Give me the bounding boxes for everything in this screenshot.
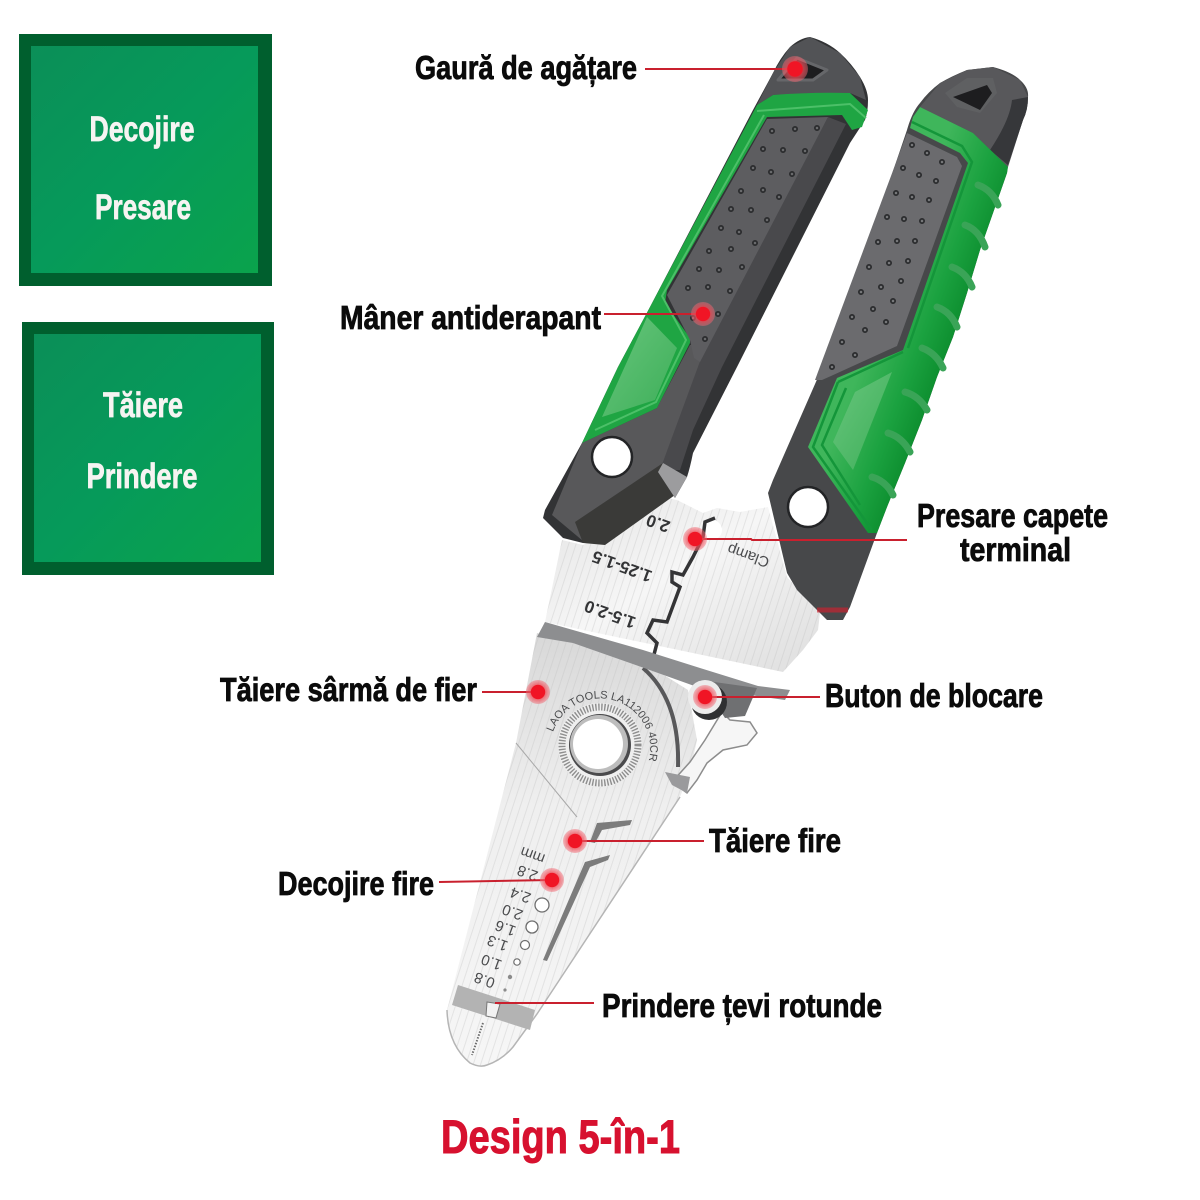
callout: decojire fire bbox=[278, 865, 564, 902]
stripping gauge: 1.6 bbox=[493, 916, 518, 939]
callout: buton de blocare: Buton de blocare bbox=[825, 677, 1043, 714]
left handle holes bbox=[778, 58, 827, 80]
stripping gauge bbox=[472, 843, 549, 992]
cross band bbox=[537, 622, 790, 700]
callout: taiere fire: Tăiere fire bbox=[709, 822, 841, 859]
callout: presare capete terminal: Presare capete bbox=[917, 497, 1108, 534]
lock latch bbox=[665, 712, 757, 793]
stripping gauge: 2.4 bbox=[508, 883, 533, 906]
callout: gaura de agatare bbox=[415, 49, 808, 87]
label: Prindere: Prindere bbox=[86, 457, 198, 496]
callout: gaura de agatare: Gaură de agățare bbox=[415, 49, 637, 87]
stripping gauge: 2.8 bbox=[515, 861, 540, 884]
label: Presare: Presare bbox=[95, 188, 191, 227]
right handle holes bbox=[945, 78, 997, 113]
callout: buton de blocare bbox=[693, 677, 1043, 714]
wire cutting slots bbox=[543, 820, 632, 961]
upper crimp plate bbox=[545, 497, 820, 672]
title: design 5-in-1: Design 5-în-1 bbox=[441, 1110, 680, 1163]
plate size labels: Clamp bbox=[725, 540, 772, 571]
callout: presare capete terminal: terminal bbox=[960, 531, 1071, 568]
plate size labels: 2.0 bbox=[644, 510, 672, 536]
stripping gauge: 2.0 bbox=[500, 900, 525, 923]
plate size labels: 1.5-2.0 bbox=[582, 596, 638, 632]
hub and engraved text: LAOA TOOLS LA112006 40CR bbox=[546, 690, 658, 761]
plate size labels: 1.25-1.5 bbox=[590, 547, 655, 586]
right handle bbox=[768, 67, 1028, 620]
panel: taiere prindere bbox=[22, 322, 274, 575]
callout: taiere sarma de fier: Tăiere sârmă de fier bbox=[220, 671, 477, 708]
callout: maner antiderapant: Mâner antiderapant bbox=[340, 299, 601, 336]
stripping gauge: 0.8 bbox=[472, 968, 497, 991]
left handle bottom facet bbox=[575, 463, 687, 545]
lower blade bbox=[447, 633, 697, 1066]
lock button bbox=[688, 680, 757, 720]
stripping gauge: 1.0 bbox=[479, 950, 504, 973]
right handle grip dots bbox=[832, 145, 942, 367]
left handle grip dots bbox=[688, 128, 817, 339]
stripping gauge: 1.3 bbox=[485, 931, 510, 954]
stripping gauge: mm bbox=[518, 843, 547, 867]
pliers illustration bbox=[446, 37, 1028, 1067]
callout: presare capete terminal bbox=[683, 497, 1108, 610]
label: Taiere: Tăiere bbox=[103, 386, 183, 425]
callout: decojire fire: Decojire fire bbox=[278, 865, 434, 902]
plate size labels bbox=[582, 510, 772, 632]
right handle ridges bbox=[872, 185, 998, 495]
callout: taiere fire bbox=[563, 822, 841, 859]
label: Decojire: Decojire bbox=[90, 110, 194, 149]
panel: decojire presare bbox=[19, 34, 272, 286]
left handle bbox=[543, 37, 868, 545]
round pipe jaw bbox=[452, 985, 535, 1055]
callout: prindere tevi rotunde: Prindere țevi rotunde bbox=[602, 987, 882, 1025]
